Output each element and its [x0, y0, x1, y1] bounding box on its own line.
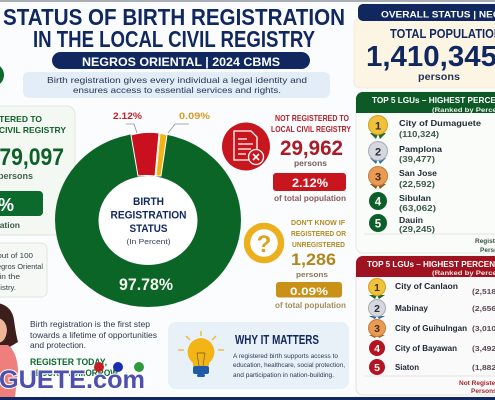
subtitle banner — [52, 52, 310, 69]
row 4: City of Bayawan — [395, 344, 457, 353]
rank 4: 4 — [375, 196, 382, 208]
panel: top unregistered LGUs — [356, 256, 495, 395]
footer bar — [0, 397, 495, 400]
title: IN THE LOCAL CIVIL REGISTRY — [33, 26, 315, 52]
icon: light bulb — [178, 331, 224, 377]
row 2: 2 — [374, 303, 380, 315]
icon: unregistered document — [222, 122, 270, 170]
row 3 — [368, 320, 495, 338]
panel: unknown stats — [275, 218, 347, 310]
rank 2 — [368, 142, 442, 164]
donut label: not registered — [113, 111, 143, 133]
closing message: and protection. — [30, 341, 86, 350]
rank 2: 2 — [375, 146, 381, 158]
rank 1: City of Dumaguete — [399, 118, 481, 128]
rank 3: 3 — [375, 172, 381, 184]
panel: unknown stats: DON'T KNOW IF — [291, 218, 345, 227]
row 5: 5 — [374, 362, 380, 374]
column note: registered persons — [475, 238, 495, 254]
panel: why it matters — [168, 322, 349, 389]
icon: green badge cut off at left — [0, 64, 4, 86]
rank 4 — [369, 192, 436, 213]
column note: not registered persons — [459, 380, 495, 395]
rank 3: (22,592) — [399, 180, 435, 189]
panel: total population — [354, 18, 495, 88]
illustration: woman — [0, 303, 18, 397]
panel: unknown stats: 1,286 — [291, 250, 336, 269]
panel: why it matters: A registered birth supports access to — [233, 353, 338, 360]
row 5 — [369, 359, 495, 375]
panel: why it matters: WHY IT MATTERS — [235, 333, 319, 347]
row 1: 1 — [374, 282, 380, 294]
panel: total population: persons — [418, 72, 460, 83]
donut label: not registered: 2.12% — [113, 111, 143, 122]
rank 4: (63,062) — [399, 204, 436, 213]
panel: not registered stats — [271, 113, 351, 203]
overall status banner — [358, 4, 495, 21]
row 2: Mabinay — [395, 304, 429, 313]
row 3: City of Guihulngan — [395, 324, 467, 333]
panel: unknown stats: UNREGISTERED — [292, 240, 346, 249]
row 1: City of Canlaon — [395, 282, 458, 291]
panel: unknown stats: persons — [296, 270, 328, 279]
row 1 — [368, 278, 495, 299]
row 2 — [368, 300, 495, 319]
closing message — [30, 320, 157, 379]
rank 3: San Jose — [399, 168, 437, 178]
closing message: REGISTER TODAY, — [30, 357, 107, 368]
panel: not registered stats: 2.12% — [292, 176, 328, 190]
panel: not registered stats: of total population — [274, 194, 346, 203]
rank 3 — [368, 166, 437, 189]
intro text box: ensures access to essential services and rights. — [73, 85, 281, 95]
panel: registered — [0, 106, 75, 235]
closing message: SECURE TOMORROW. — [30, 368, 120, 379]
panel: unknown stats: REGISTERED OR — [291, 229, 347, 238]
rank 5: 5 — [375, 218, 382, 230]
donut centre label: STATUS — [130, 223, 168, 235]
donut label: unknown — [168, 111, 211, 133]
rank 1: (110,324) — [399, 130, 439, 139]
subtitle banner: NEGROS ORIENTAL | 2024 CBMS — [82, 57, 280, 69]
panel: not registered stats: NOT REGISTERED TO — [275, 113, 349, 123]
watermark: GUETE.com — [0, 366, 145, 394]
rank 2: Pamplona — [399, 144, 442, 154]
panel: why it matters: education, healthcare, social protection, — [233, 362, 345, 369]
intro text box — [23, 72, 330, 98]
row 3: 3 — [374, 323, 380, 335]
rank 5 — [369, 214, 435, 234]
rank 1 — [368, 116, 481, 139]
donut chart — [55, 111, 241, 307]
row 4: 4 — [374, 343, 380, 355]
rank 5: (29,245) — [399, 225, 435, 234]
donut centre label — [110, 196, 187, 246]
callout: out of 100 — [0, 243, 47, 297]
row 5: Siaton — [395, 363, 419, 372]
panel: unknown stats: of total population — [275, 301, 346, 310]
rank 4: Sibulan — [399, 193, 431, 203]
panel: total population: 1,410,345 — [366, 41, 495, 73]
donut value: registered: 97.78% — [119, 276, 173, 294]
row 4 — [369, 340, 495, 356]
donut centre label: BIRTH — [133, 196, 164, 208]
title — [3, 4, 345, 52]
panel: not registered stats: persons — [294, 159, 328, 168]
icon: question mark — [247, 226, 281, 260]
closing message: Birth registration is the first step — [30, 320, 151, 329]
donut centre label: (In Percent) — [126, 237, 171, 246]
panel: not registered stats: LOCAL CIVIL REGISTRY — [271, 124, 351, 134]
intro text box: Birth registration gives every individual a legal identity and — [47, 75, 307, 85]
panel: not registered stats: 29,962 — [280, 137, 343, 160]
icon: question mark: ? — [257, 231, 271, 258]
panel: unknown stats: 0.09% — [290, 286, 328, 298]
rank 2: (39,477) — [399, 155, 435, 164]
donut centre label: REGISTRATION — [110, 210, 187, 222]
panel: why it matters: and participation in nation-building. — [233, 372, 334, 379]
title: STATUS OF BIRTH REGISTRATION — [3, 4, 345, 30]
panel: top registered LGUs — [356, 92, 495, 254]
rank 5: Dauin — [399, 215, 423, 225]
rank 1: 1 — [375, 120, 381, 132]
closing message: towards a lifetime of opportunities — [30, 331, 157, 340]
donut label: unknown: 0.09% — [179, 111, 211, 122]
